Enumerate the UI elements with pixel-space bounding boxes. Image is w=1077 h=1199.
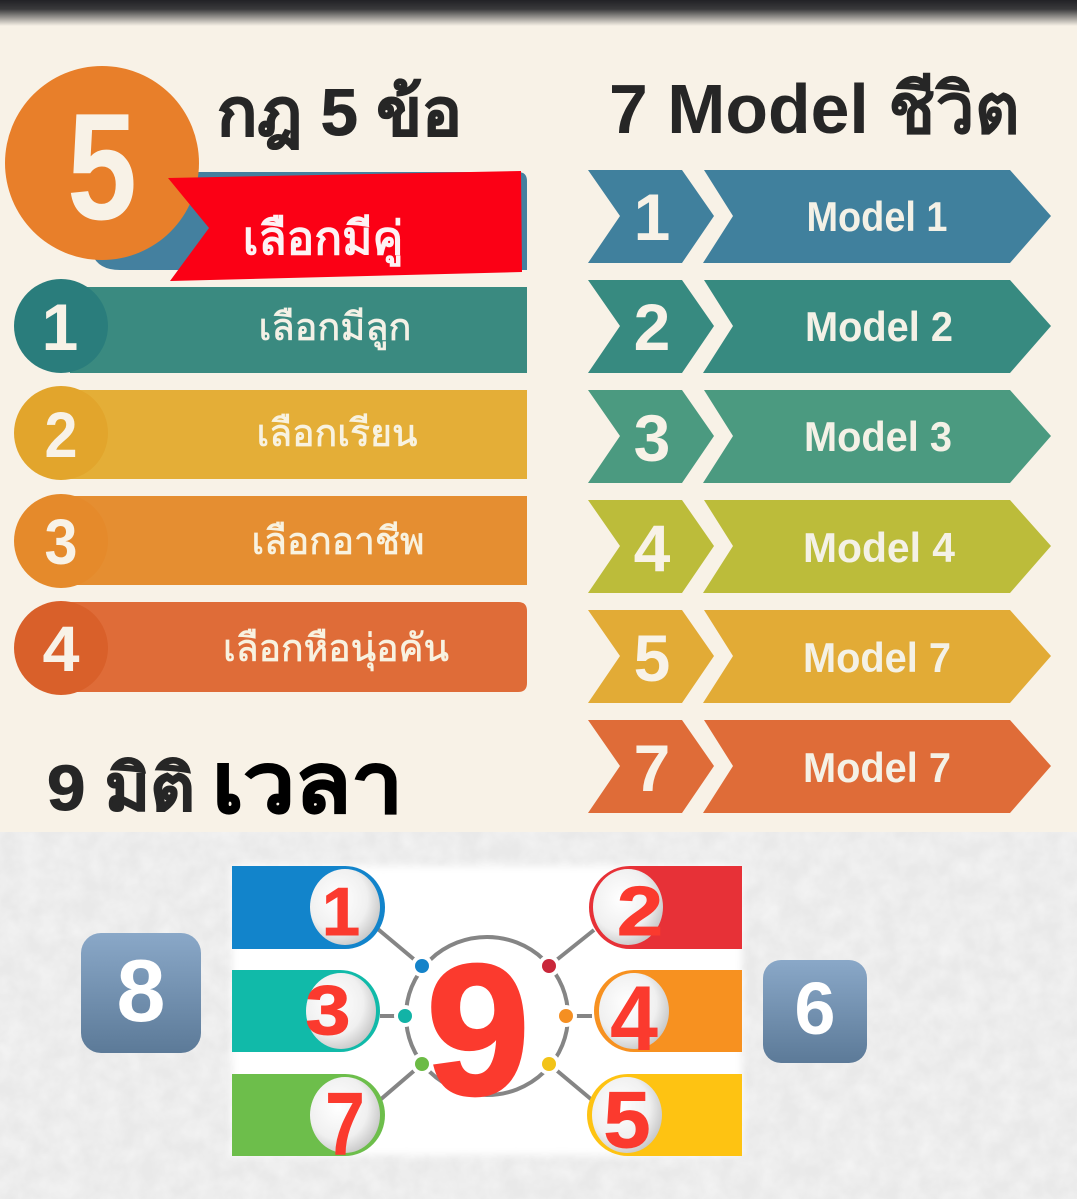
big circle 5 [5, 66, 199, 260]
item 3 [232, 970, 380, 1052]
keycap 8 [81, 933, 201, 1053]
model row 2 [588, 280, 1051, 373]
item 2: 2 [617, 872, 663, 950]
model row 4 [588, 500, 1051, 593]
heading: 9 dimensions of time [47, 736, 403, 830]
model row 5: Model 7 [803, 634, 951, 681]
rule 3: 3 [44, 506, 78, 578]
rule 2: 2 [44, 399, 78, 471]
rule 4: เลือกหือนุ่อคัน [223, 628, 449, 671]
panel: 9 dimensions diagram [232, 866, 742, 1175]
panel: 5 rules [5, 66, 527, 695]
item 2 [589, 866, 742, 950]
rule 3 [14, 494, 527, 588]
model row 4: 4 [634, 511, 671, 585]
model row 6: 7 [634, 731, 670, 805]
item 3: 3 [306, 971, 350, 1049]
model row 2: Model 2 [805, 303, 953, 350]
item 5 [587, 1074, 742, 1164]
model row 3: 3 [634, 401, 670, 475]
model row 3 [588, 390, 1051, 483]
connector lines and central ring [373, 925, 594, 1100]
big circle 5: 5 [67, 82, 137, 252]
heading: 5 rules: กฎ 5 ข้อ [217, 75, 462, 150]
rule 1: เลือกมีลูก [258, 307, 412, 350]
page background [0, 0, 1077, 832]
rule 2: เลือกเรียน [256, 413, 418, 455]
keycap 6 [763, 960, 867, 1063]
white diagram backdrop [232, 866, 742, 1155]
rule 2 [14, 386, 527, 480]
item 4 [594, 968, 742, 1070]
model row 2: 2 [634, 290, 670, 364]
connector nodes [394, 955, 577, 1075]
red ribbon: choose a partner: เลือกมีคู่ [243, 212, 403, 267]
first rule backing bar [90, 172, 527, 270]
top dark band [0, 0, 1077, 26]
model row 3: Model 3 [804, 413, 952, 460]
model row 5 [588, 610, 1051, 703]
rule 1 [14, 279, 527, 373]
item 4: 4 [610, 968, 658, 1070]
item 1: 1 [322, 874, 360, 950]
lower textured background [0, 832, 1077, 1199]
rule 3: เลือกอาชีพ [252, 521, 424, 563]
panel: 7 life models [588, 70, 1051, 813]
red ribbon: choose a partner [168, 171, 522, 281]
item 7 [232, 1074, 385, 1175]
item 1 [232, 866, 385, 950]
rule 4: 4 [42, 613, 80, 685]
model row 6: Model 7 [803, 744, 951, 791]
model row 4: Model 4 [803, 524, 956, 571]
item 5: 5 [604, 1075, 650, 1164]
model row 6 [588, 720, 1051, 813]
model row 1 [588, 170, 1051, 263]
model row 5: 5 [634, 621, 670, 695]
rule 4 [14, 601, 527, 695]
heading: 7 models: 7 Model ชีวิต [609, 70, 1020, 148]
center number 9: 9 [426, 927, 530, 1134]
keycap 8: 8 [117, 941, 165, 1040]
model row 1: Model 1 [806, 193, 948, 240]
rule 1: 1 [42, 290, 78, 364]
model row 1: 1 [634, 180, 670, 254]
keycap 6: 6 [794, 967, 836, 1050]
item 7: 7 [325, 1075, 365, 1175]
heading: 9 dimensions of time: เวลา [212, 736, 403, 830]
heading: 9 dimensions of time: 9 มิติ [47, 752, 195, 824]
